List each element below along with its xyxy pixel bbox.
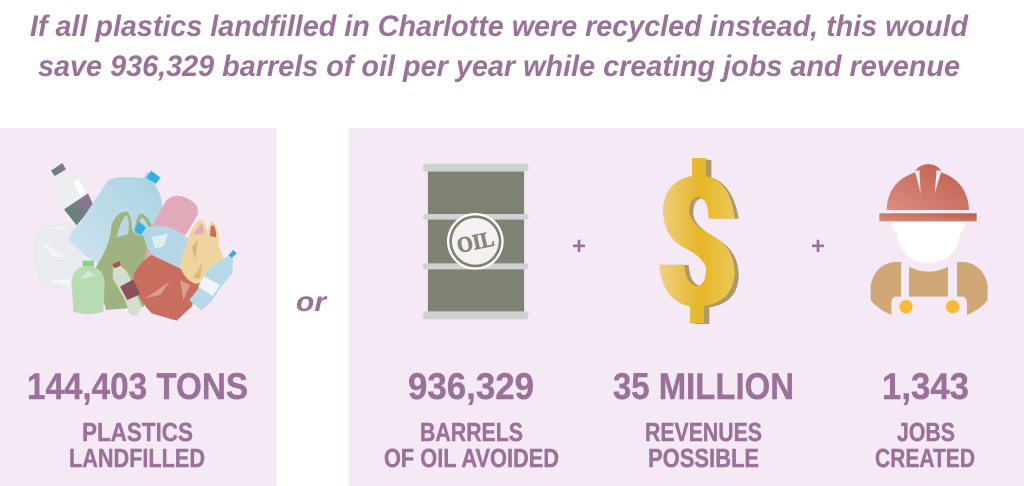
green jug <box>72 261 105 314</box>
title <box>30 10 969 83</box>
red bag <box>133 255 200 321</box>
icon: oil barrel <box>423 164 528 319</box>
stat: 35 million: REVENUES <box>645 417 762 447</box>
panel: benefits of recycling <box>349 128 1024 486</box>
yellow bag <box>180 220 223 284</box>
or label: or <box>296 286 328 317</box>
stat: 1,343 jobs: 1,343 <box>882 366 969 407</box>
stat: 144,403 tons: PLASTICS <box>82 417 193 447</box>
stat: 1,343 jobs: CREATED <box>875 443 975 473</box>
large water jug <box>68 172 163 265</box>
green bag <box>96 212 152 310</box>
stat: 936,329 barrels: 936,329 <box>408 366 534 407</box>
icon: dollar sign <box>659 158 739 324</box>
panel: plastics landfilled <box>0 128 276 486</box>
icon: construction worker <box>871 164 988 315</box>
clear bottle <box>135 222 188 272</box>
white plastic bag <box>33 222 87 290</box>
small cola bottle <box>113 261 142 316</box>
stat: 936,329 barrels: BARRELS <box>420 417 523 447</box>
stat: 35 million <box>613 366 794 473</box>
stat: 1,343 jobs: JOBS <box>897 417 955 447</box>
stat: 35 million: 35 MILLION <box>613 366 794 407</box>
stat: 1,343 jobs <box>875 366 975 473</box>
oil text: OIL <box>455 226 496 258</box>
plus sign: + <box>572 233 586 260</box>
stat: 144,403 tons: LANDFILLED <box>69 443 205 473</box>
plus sign: + <box>811 233 825 260</box>
stat: 936,329 barrels: OF OIL AVOIDED <box>384 443 559 473</box>
stat: 144,403 tons <box>27 366 248 473</box>
tall white bottle <box>53 171 93 226</box>
title: save 936,329 barrels of oil per year while creating jobs and revenue <box>38 50 960 83</box>
title: If all plastics landfilled in Charlotte were recycled instead, this would <box>30 10 969 43</box>
stat: 144,403 tons: 144,403 TONS <box>27 366 248 407</box>
slim blue bottle <box>189 256 233 311</box>
icon: pile of plastics <box>33 163 237 321</box>
stat: 35 million: POSSIBLE <box>648 443 759 473</box>
pink bottle <box>143 196 198 263</box>
stat: 936,329 barrels <box>384 366 559 473</box>
